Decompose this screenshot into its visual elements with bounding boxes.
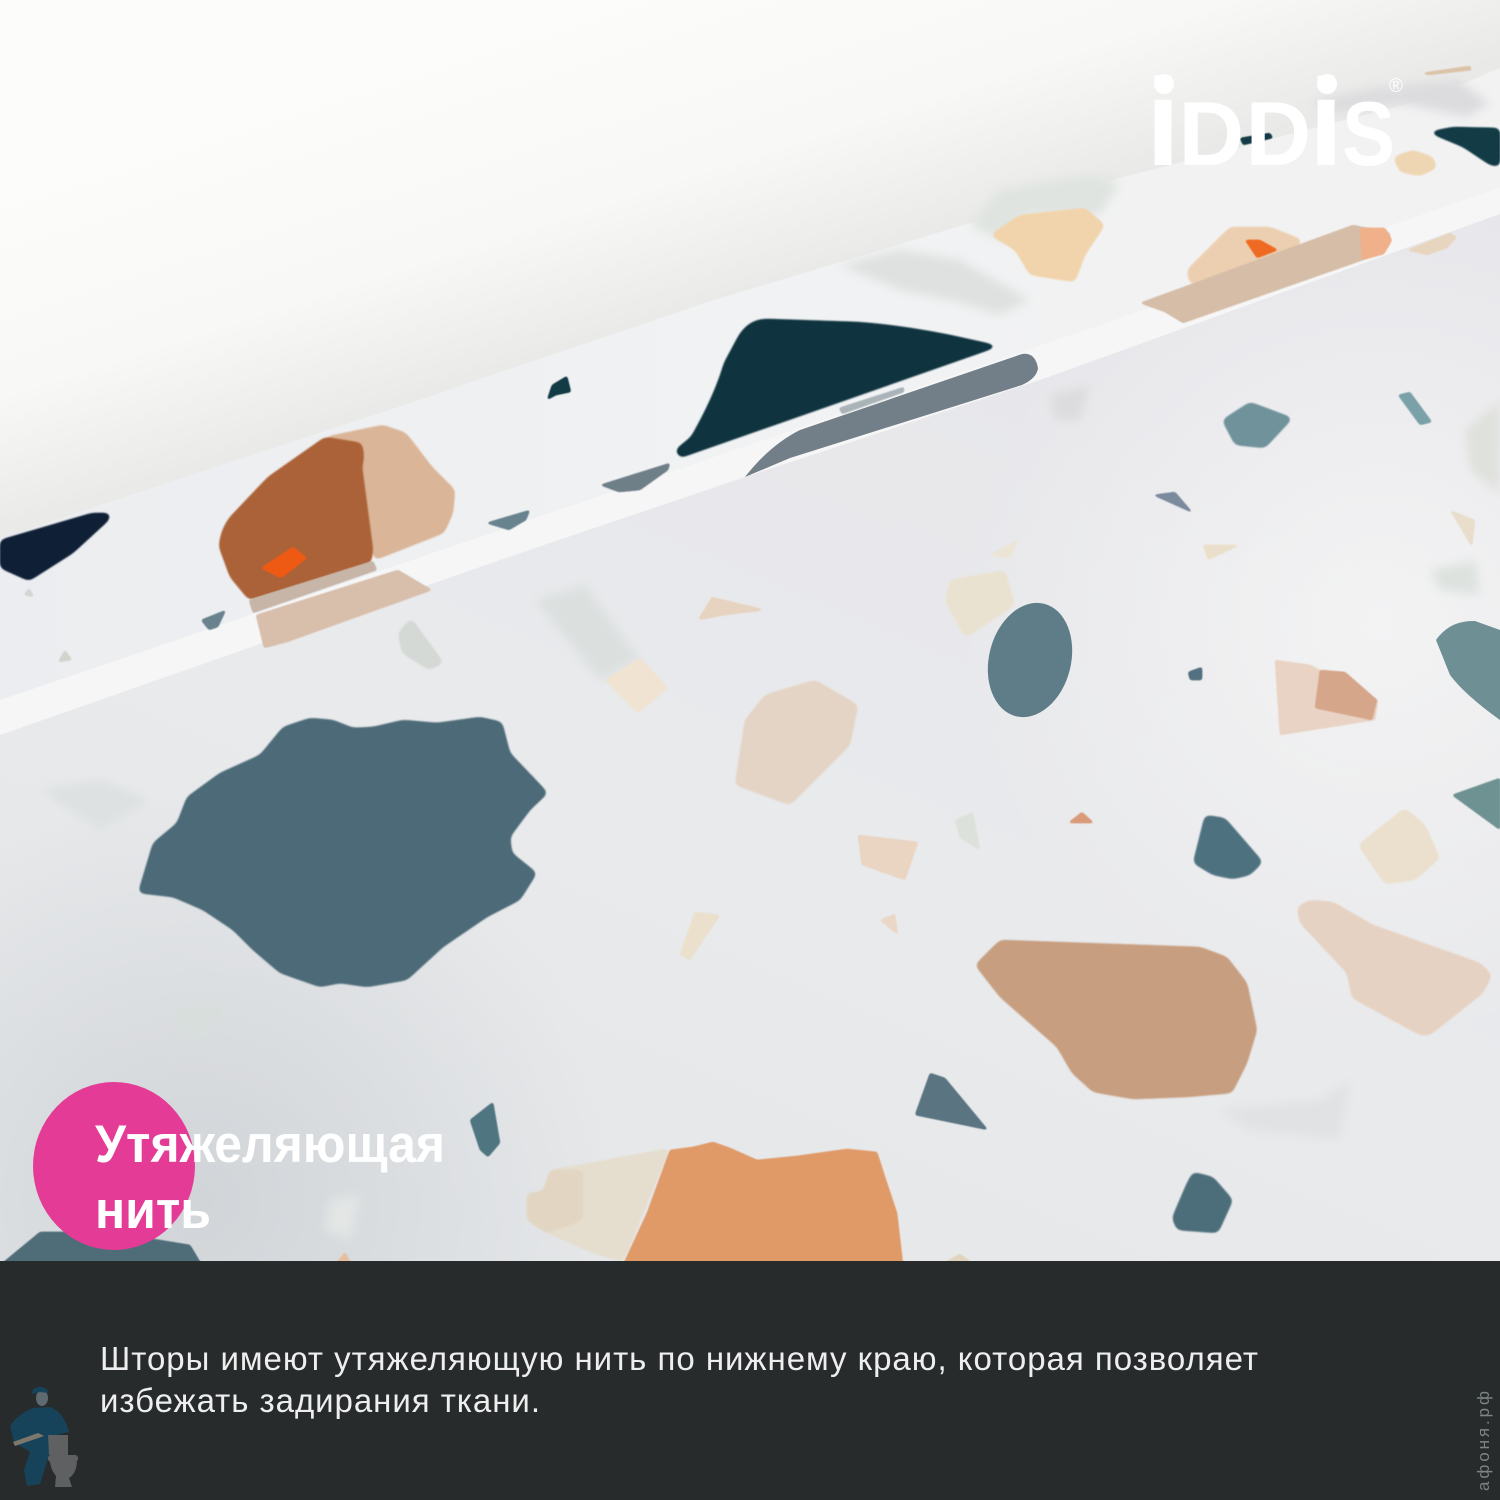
shape: darker tan overlap [1315,670,1377,720]
shape: slate stone lower right [1172,1172,1233,1233]
heading: weighting thread: нить [95,1181,211,1240]
pink badge circle [33,1082,195,1250]
shape: peach stone right [1187,227,1303,285]
shape: orange chip [1068,812,1094,823]
background wall [0,0,1500,720]
shape: navy stone left [0,513,111,581]
description text: Шторы имеют утяжеляющую нить по нижнему краю, которая позволяет [100,1340,1258,1377]
shape: cream stone right [1358,808,1440,884]
toilet bowl [50,1462,77,1487]
shape: teal corner right [1452,778,1500,830]
shape: teal sliver [1398,392,1432,425]
folded fabric band [0,68,1500,700]
lower sheet terrazzo shapes [0,392,1500,1265]
logo registered mark: ® [1389,76,1403,97]
shape: beige stone bottom [527,1148,670,1262]
seam tan left [256,570,432,648]
band terrazzo shapes [0,66,1500,662]
shape: large slate stone [138,717,548,987]
shape: orange stone bottom [623,1142,903,1265]
shape: tan sliver [698,597,765,620]
faint pale terrazzo shapes [40,80,1500,1240]
logo letter i second: i [1309,55,1343,192]
toilet seat [48,1455,78,1462]
shape: teal stone upper [1222,402,1293,448]
description text: избежать задирания ткани. [100,1382,540,1419]
shape: top sliver [1422,66,1472,75]
shape: dark chip behind logo [1240,133,1273,145]
icon: plumber with toilet [10,1387,78,1487]
seam orange edge [1360,228,1392,260]
shape: orange fleck right [1245,240,1278,258]
shape: small pale chip band [58,650,72,662]
logo letter D second: D [1246,84,1311,185]
shape: gray chip [1153,492,1193,513]
seam show-through flecks [201,463,670,630]
shape: tan stone [975,940,1257,1099]
plumber body [10,1407,69,1486]
shape: orange fleck [261,547,307,578]
shape: dark stone top right [1427,127,1500,167]
shape: stitched mesh over seam [839,387,904,414]
lower curtain sheet [0,200,1500,1261]
shape: tan stone [325,425,455,560]
shape: peach dot [1393,150,1437,176]
shape: slate stone mid right [1193,815,1263,879]
shape: slate sliver [470,1102,500,1157]
shape: pale chip [955,812,980,850]
logo: IDDIS [1146,55,1403,192]
seam mesh left [249,561,377,613]
shape: tiny slate chip [1188,667,1202,680]
shape: tan chip [858,835,918,880]
shape: pale gray pebble [398,618,444,670]
shape: bottom chip right [940,1254,975,1265]
shape: cream diamond [605,658,668,713]
plumber cap [32,1387,48,1394]
shape: tiny chip [880,914,898,935]
toilet tank [48,1435,68,1455]
watermark: site name: афоня.рф [1474,1391,1493,1491]
shape: bottom chip [335,1252,352,1265]
shape: cream chip small [990,540,1018,558]
shape: cream sliver [680,912,720,960]
logo letter D: D [1178,84,1244,185]
shape: cream chip [1203,545,1240,560]
logo letter S: S [1342,84,1395,185]
seam show-through gray-blue tube [745,354,1038,477]
shape: slate pebble right edge [1436,621,1500,720]
fold seam bevel [0,188,1500,735]
shape: slate triangle [915,1073,988,1130]
shape: light tan stone [1297,900,1492,1035]
seam show-through tan [1140,225,1390,323]
heading: weighting thread: Утяжеляющая [95,1115,445,1174]
peach under seam [1407,233,1457,255]
shape: cream stone [945,570,1015,638]
shape: beige blob [735,680,858,805]
shape: slate stone bottom left [0,1232,202,1265]
plumber face [36,1390,48,1406]
shape: slate pebble [976,594,1084,726]
shape: cream chip right [1450,510,1475,547]
shape: small pale chip left [24,588,34,597]
shape: brown stone [219,437,373,600]
shape: small dark stone [547,376,571,400]
logo letter i: i [1146,55,1180,192]
shape: dark teal stone [675,319,1000,458]
shape: beige overlap [527,1170,583,1233]
footer dark bar [0,1261,1500,1500]
wrench [13,1433,44,1446]
shape: pink-tan stone [1275,660,1378,735]
shape: peach stone [990,208,1105,282]
